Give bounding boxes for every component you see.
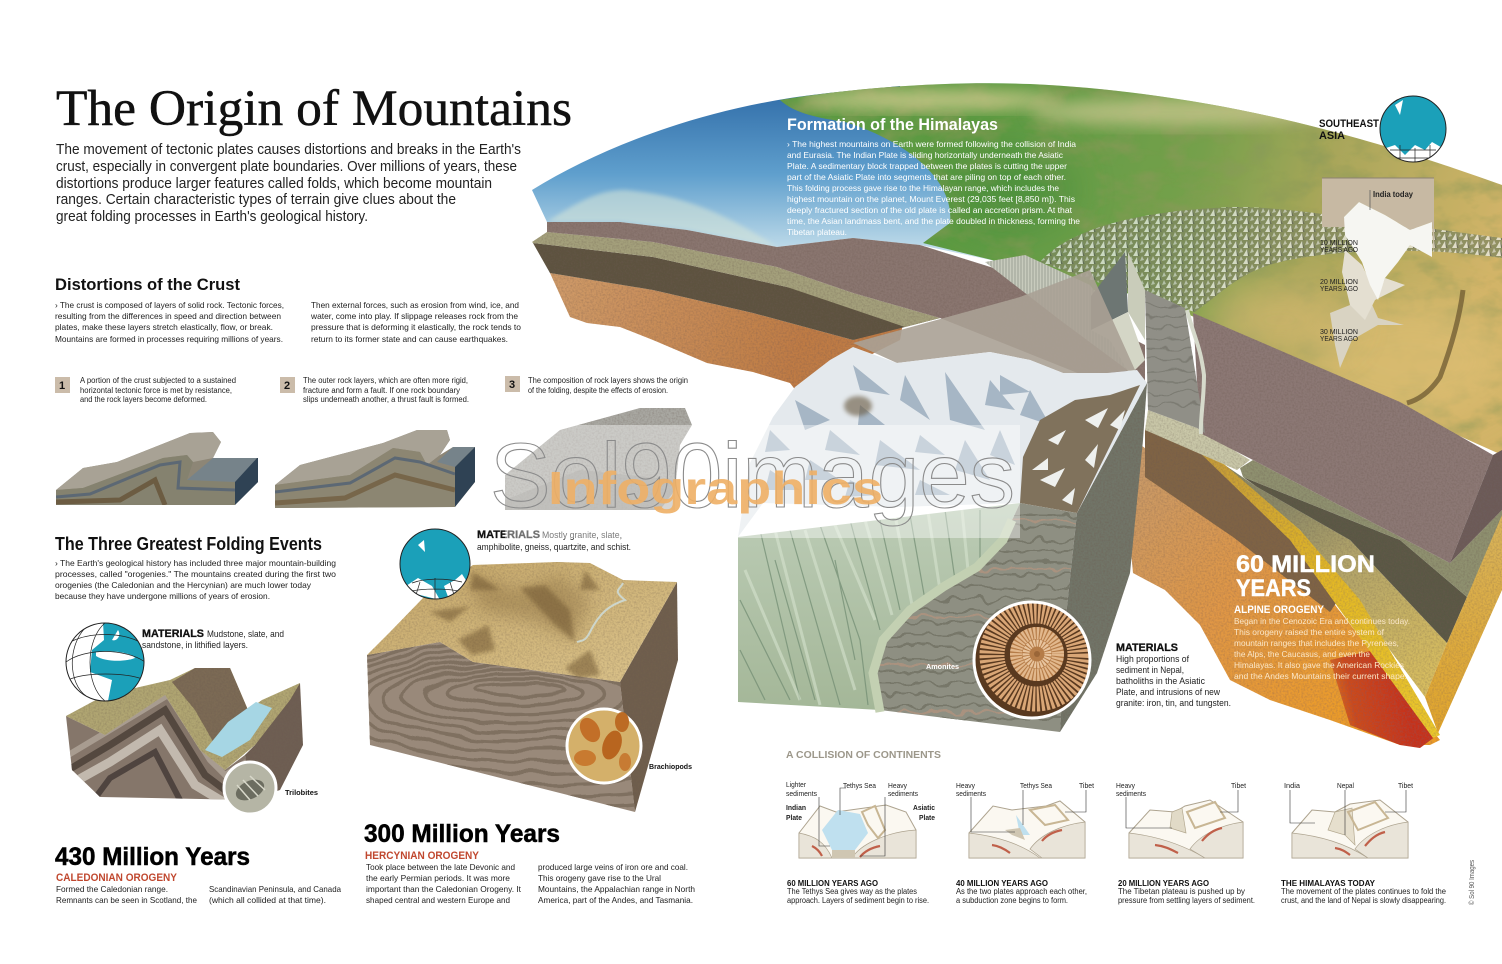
title: The Origin of Mountains [56, 81, 572, 137]
fossil: brachiopods [567, 709, 641, 783]
diagram labels: Heavy [956, 781, 975, 790]
caption: 60 million years ago: The Tethys Sea gives way as the plates [787, 887, 917, 896]
step 2: The outer rock layers, which are often more rigid, [303, 376, 468, 385]
credit: © Sol 90 Images [1468, 860, 1476, 905]
diagram: the Himalayas today [1290, 790, 1408, 858]
hercynian caption: the early Permian periods. It was more [366, 873, 510, 883]
diagram labels: Tibet [1231, 781, 1246, 790]
region label: Southeast Asia: ASIA [1319, 130, 1345, 142]
hercynian caption: America, part of the Andes, and Tasmania. [538, 895, 693, 905]
distortions right column: return to its former state and can cause earthquakes. [311, 334, 508, 344]
caption: 20 million years ago: pressure from settling layers of sediment. [1118, 896, 1255, 905]
Himalaya materials text: MATERIALS [1116, 642, 1178, 654]
India today [1344, 202, 1432, 300]
fold block 1 [56, 432, 258, 505]
Alpine orogeny text: 60 MILLION [1236, 551, 1375, 578]
Himalayas text block: and Eurasia. The Indian Plate is sliding horizontally underneath the Asiatic [787, 150, 1064, 160]
caledonian caption: Scandinavian Peninsula, and Canada [209, 884, 341, 894]
caption: 40 million years ago: As the two plates approach each other, [956, 887, 1087, 896]
white vein [1187, 310, 1204, 434]
caledonian materials text: MATERIALS [142, 628, 204, 640]
hercynian caption: HERCYNIAN OROGENY [365, 850, 480, 862]
Alpine orogeny text: This orogeny raised the entire system of [1234, 627, 1385, 637]
step 3: of the folding, despite the effects of erosion. [528, 386, 668, 395]
folding events text [55, 558, 336, 601]
map: India drift inset: 30 MILLION [1320, 327, 1358, 336]
Himalaya materials text: High proportions of [1116, 654, 1189, 665]
diagram labels: Asiatic [913, 803, 935, 812]
step 2: 2 [284, 380, 290, 392]
gray wavy block [1145, 290, 1205, 433]
folding events text: › The Earth's geological history has included three major mountain-building [55, 558, 336, 568]
intro text [56, 142, 521, 225]
hercynian materials text: amphibolite, gneiss, quartzite, and schist. [477, 542, 631, 553]
land surface [780, 83, 1502, 455]
Himalaya materials text: sediment in Nepal, [1116, 665, 1184, 676]
fossil: trilobite [224, 762, 276, 814]
panel: Hercynian block [367, 562, 678, 812]
hercynian materials text: MATERIALS [477, 529, 540, 541]
Alpine orogeny text: Himalayas. It also gave the American Rockies [1234, 660, 1404, 670]
folding events text: orogenies (the Caledonian and the Hercynian) are much lower today [55, 580, 312, 590]
hercynian caption: important than the Caledonian Orogeny. It [366, 884, 522, 894]
map: India drift inset: YEARS AGO [1320, 334, 1358, 343]
diagram labels: Lighter [786, 780, 807, 789]
Himalaya materials text: batholiths in the Asiatic [1116, 676, 1205, 687]
step 1: and the rock layers become deformed. [80, 395, 207, 404]
diagram labels: sediments [888, 789, 918, 798]
caledonian caption: Remnants can be seen in Scotland, the [56, 895, 197, 905]
mountain range band [1040, 207, 1502, 312]
rocky dirty side [1020, 385, 1140, 513]
Himalayas text block: Plate. A sedimentary block trapped between the plates is cutting the upper [787, 161, 1067, 171]
distortions left column [55, 300, 284, 344]
diagram labels: sediments [786, 789, 817, 798]
diagram: 60 million years ago [799, 788, 916, 858]
distortions right column: Then external forces, such as erosion from wind, ice, and [311, 300, 519, 310]
fossil: ammonite [974, 602, 1090, 718]
Himalayas text block: Formation of the Himalayas [787, 115, 998, 134]
Alpine orogeny text: mountain ranges that includes the Pyrenees, [1234, 638, 1399, 648]
watermark: Sol90images [490, 425, 1015, 527]
heading: a collision of continents: A COLLISION OF CONTINENTS [786, 750, 941, 761]
distortions left column: plates, make these layers stretch elastically, flow, or break. [55, 322, 273, 332]
central block: right dark face [1060, 383, 1147, 732]
caption: 20 million years ago: The Tibetan plateau is pushed up by [1118, 887, 1245, 896]
label: ammonites: Amonites [926, 662, 959, 671]
heading: distortions of the crust: Distortions of the Crust [55, 275, 240, 294]
diagram labels: Tibet [1079, 781, 1094, 790]
hercynian materials text [477, 529, 631, 553]
step 2: slips underneath another, a thrust fault is formed. [303, 395, 469, 404]
fold block 3 [505, 408, 692, 510]
caledonian caption: (which all collided at that time). [209, 895, 326, 905]
caption: 40 million years ago [956, 879, 1087, 905]
map: India drift inset: YEARS AGO [1320, 245, 1358, 254]
central block: wavy strata [878, 503, 1077, 732]
step 1: horizontal tectonic force is met by resistance, [80, 386, 232, 395]
Himalayas text block [787, 115, 1080, 237]
diagram labels: Heavy [1116, 781, 1135, 790]
diagram: 40 million years ago [969, 790, 1086, 858]
map: India drift inset: YEARS AGO [1320, 284, 1358, 293]
diagram labels: Heavy [888, 781, 907, 790]
caption: 20 million years ago: 20 MILLION YEARS AGO [1118, 879, 1209, 888]
map: India drift inset: India today [1373, 190, 1414, 199]
icon: globe Europe and Africa [66, 622, 150, 702]
caption: 60 million years ago: 60 MILLION YEARS AGO [787, 879, 878, 888]
Himalaya materials text: Plate, and intrusions of new [1116, 687, 1220, 698]
caption: 20 million years ago [1118, 879, 1255, 905]
hercynian caption: shaped central and western Europe and [366, 895, 510, 905]
intro text: ranges. Certain characteristic types of terrain give clues about the [56, 192, 456, 208]
step 1: 1 [59, 380, 65, 392]
diagram labels: Nepal [1337, 781, 1354, 790]
distortions left column: Mountains are formed in processes requiring millions of years. [55, 334, 283, 344]
map: India drift inset [1320, 178, 1434, 368]
caledonian materials text: Mudstone, slate, and [207, 629, 284, 640]
label: trilobites: Trilobites [285, 788, 318, 797]
hercynian caption: This orogeny gave rise to the Ural [538, 873, 661, 883]
region label: Southeast Asia: SOUTHEAST [1319, 118, 1379, 130]
diagram labels: Tibet [1398, 781, 1413, 790]
Himalayas text block: part of the Asiatic Plate into segments that are piling on top of each other. [787, 172, 1066, 182]
diagram labels: Plate [919, 813, 935, 822]
map: India drift inset: 10 MILLION [1320, 238, 1358, 247]
Himalayas text block: This folding process gave rise to the Himalayan range, which includes the [787, 183, 1059, 193]
hercynian caption: 300 Million Years [364, 820, 560, 848]
caledonian materials text: sandstone, in lithified layers. [142, 640, 248, 651]
intro text: The movement of tectonic plates causes distortions and breaks in the Earth's [56, 142, 521, 158]
rift valley [1407, 290, 1463, 403]
step 2 [280, 376, 469, 404]
sea and sky [532, 86, 1000, 262]
Himalayas text block: › The highest mountains on Earth were formed following the collision of India [787, 139, 1076, 149]
diagram: 20 million years ago [1126, 790, 1243, 858]
panel: Caledonian block [60, 668, 303, 805]
hercynian caption: Mountains, the Appalachian range in North [538, 884, 695, 894]
Alpine orogeny text: Began in the Cenozoic Era and continues today. [1234, 616, 1410, 626]
hercynian caption [364, 820, 695, 905]
caption: the Himalayas today: THE HIMALAYAS TODAY [1281, 879, 1376, 888]
Himalayas text block: deeply fractured section of the old plate is called an accretion prism. At that [787, 205, 1073, 215]
caledonian caption: Formed the Caledonian range. [56, 884, 168, 894]
Alpine orogeny text [1234, 551, 1410, 681]
distortions right column: water, come into play. If slippage releases rock from the [310, 311, 518, 321]
deep layers stack [1120, 410, 1502, 748]
intro text: distortions produce larger features called folds, which become mountain [56, 176, 492, 192]
Alpine orogeny text: ALPINE OROGENY [1234, 604, 1325, 616]
India 30 million years ago [1330, 300, 1404, 368]
snow shadows [765, 365, 1050, 497]
central block: snowy top [738, 347, 1147, 537]
caption: the Himalayas today: crust, and the land of Nepal is slowly disappearing. [1281, 896, 1446, 905]
icon: globe Southeast Asia [1380, 96, 1446, 165]
folding events text: because they have undergone millions of years of erosion. [55, 591, 270, 601]
caption: 60 million years ago: approach. Layers of sediment begin to rise. [787, 896, 929, 905]
purple rock block [1193, 313, 1502, 563]
icon: globe Asia Pacific [400, 529, 472, 602]
caption: 40 million years ago: 40 MILLION YEARS AGO [956, 879, 1048, 888]
region label: Southeast Asia [1319, 118, 1379, 142]
step 1 [55, 376, 236, 404]
folding events text: processes, called "orogenies." The mountains created during the first two [55, 569, 336, 579]
Himalayas text block: time, the Asian landmass bent, and the plate doubled in thickness, forming the [787, 216, 1080, 226]
small block above vein [1091, 252, 1145, 375]
diagram labels: India [1284, 781, 1300, 790]
hercynian caption: Took place between the late Devonic and [366, 862, 515, 872]
label: brachiopods: Brachiopods [649, 762, 692, 771]
caption: the Himalayas today: The movement of the plates continues to fold the [1281, 887, 1447, 896]
caledonian caption: 430 Million Years [55, 843, 250, 871]
caledonian materials text [142, 628, 284, 651]
diagram labels: Tethys Sea [843, 781, 876, 790]
caption: the Himalayas today [1281, 879, 1447, 905]
distortions right column: pressure that is deforming it elastically, the rock tends to [311, 322, 521, 332]
map: India drift inset: 20 MILLION [1320, 277, 1358, 286]
intro text: great folding processes in Earth's geological history. [56, 209, 368, 225]
horizon haze and land tones [800, 90, 1502, 420]
intro text: crust, especially in convergent plate boundaries. Over millions of years, these [56, 159, 517, 175]
diagram labels: sediments [956, 789, 986, 798]
fold block 2 [275, 430, 475, 508]
India 20 million years ago [1342, 250, 1405, 320]
caption: 60 million years ago [787, 879, 929, 905]
step 2: fracture and form a fault. If one rock boundary [303, 386, 460, 395]
Himalaya materials text: granite: iron, tin, and tungsten. [1116, 698, 1231, 709]
caledonian caption [55, 843, 341, 905]
diagram labels: Plate [786, 813, 802, 822]
diagram labels [786, 780, 1413, 822]
distortions right column [310, 300, 521, 344]
distortions left column: › The crust is composed of layers of solid rock. Tectonic forces, [55, 300, 284, 310]
hazy distant coast [547, 190, 777, 247]
Alpine orogeny text: and the Andes Mountains their current shape. [1234, 671, 1407, 681]
hercynian caption: produced large veins of iron ore and coal. [538, 862, 688, 872]
caledonian caption: CALEDONIAN OROGENY [56, 872, 178, 884]
diagram labels: Indian [786, 803, 806, 812]
fan of strata lines [985, 255, 1145, 372]
Alpine orogeny text: YEARS [1236, 575, 1311, 602]
diagram labels: Tethys Sea [1020, 781, 1052, 790]
Himalaya materials text [1116, 642, 1231, 709]
central block: green front face [735, 500, 1025, 710]
step 1: A portion of the crust subjected to a sustained [80, 376, 236, 385]
step 3 [505, 376, 688, 395]
left cross-section layers [532, 222, 1145, 400]
central block: river [873, 520, 1012, 712]
step 3: The composition of rock layers shows the origin [528, 376, 688, 385]
Himalayas text block: highest mountain on the planet, Mount Everest (29,035 feet [8,850 m]). This [787, 194, 1075, 204]
distortions left column: resulting from the differences in speed and direction between [55, 311, 281, 321]
diagram labels: sediments [1116, 789, 1146, 798]
heading: three greatest folding events: The Three Greatest Folding Events [55, 534, 322, 554]
panel: Himalaya earth cross-section illustration [532, 83, 1502, 748]
step 3: 3 [509, 379, 515, 391]
projection wedge [853, 270, 1135, 373]
hercynian materials text: Mostly granite, slate, [542, 530, 622, 541]
caption: 40 million years ago: a subduction zone begins to form. [956, 896, 1068, 905]
watermark: Infographics [548, 462, 883, 514]
Alpine orogeny text: the Alps, the Caucasus, and even the [1234, 649, 1370, 659]
Himalayas text block: Tibetan plateau. [787, 227, 847, 237]
